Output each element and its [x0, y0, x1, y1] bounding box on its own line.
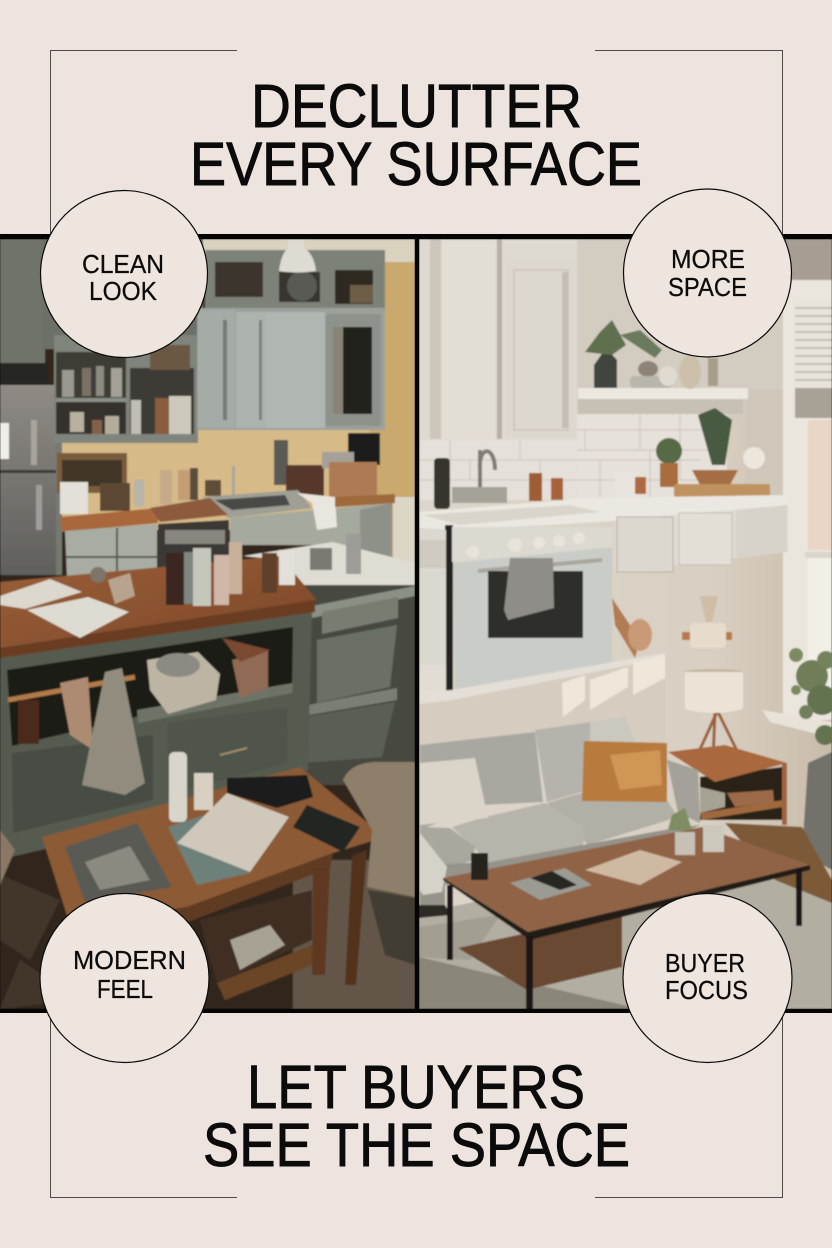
towels and rail	[8, 677, 135, 700]
appliance and basket	[147, 652, 220, 714]
counter decor	[434, 458, 450, 509]
closing headline: SEE THE SPACE	[203, 1111, 630, 1179]
right cabinets	[300, 585, 415, 785]
callout: more space: SPACE	[668, 272, 747, 302]
title: DECLUTTER	[251, 72, 582, 140]
callout: clean look: CLEAN	[82, 249, 164, 279]
callout: modern feel: FEEL	[97, 974, 153, 1004]
title	[190, 72, 642, 198]
island base	[0, 608, 312, 860]
coffee table	[458, 916, 623, 990]
callout: more space	[624, 189, 792, 357]
callout: modern feel	[40, 894, 209, 1062]
callout: buyer focus: FOCUS	[665, 975, 748, 1005]
right window sill, plant, armchair	[762, 710, 832, 734]
wall and sunlight below	[420, 696, 513, 744]
lower doors	[197, 308, 385, 430]
lamp	[698, 712, 738, 750]
bottles cluster	[166, 553, 184, 605]
counter and cabinets	[419, 495, 790, 530]
callout: clean look: LOOK	[89, 276, 158, 306]
white counter	[243, 542, 415, 586]
callout: clean look	[40, 190, 208, 358]
window and blinds	[783, 280, 832, 720]
table objects	[510, 868, 592, 900]
frame: bottom thin corner lines	[50, 1012, 782, 1198]
chair	[343, 762, 415, 897]
sofa	[420, 732, 543, 830]
callout: more space: MORE	[671, 244, 745, 274]
island butcher block	[0, 556, 315, 658]
stove	[445, 525, 453, 695]
panel: tidy kitchen and living room photo	[419, 239, 832, 1009]
closing headline	[203, 1053, 630, 1179]
table items	[65, 823, 172, 902]
centre divider	[415, 234, 419, 1013]
floating shelf	[578, 388, 748, 399]
pendant lamp	[279, 239, 316, 272]
white cabinets	[502, 240, 577, 440]
fridge	[0, 385, 56, 575]
upper wall	[762, 313, 782, 390]
photo band black border	[0, 234, 832, 1013]
callout: buyer focus: BUYER	[665, 948, 745, 978]
wooden table	[42, 767, 385, 925]
upper-left cabinet	[0, 239, 45, 363]
side table	[700, 767, 782, 820]
counter clutter	[57, 453, 127, 493]
shelf decor	[594, 348, 617, 388]
floor	[293, 860, 415, 1009]
open shelving	[54, 335, 198, 443]
frame: top thin corner lines	[50, 50, 782, 235]
subway tile backsplash	[419, 440, 577, 500]
glass cabinets top	[205, 250, 385, 314]
title: EVERY SURFACE	[190, 130, 642, 198]
callout: modern feel: MODERN	[73, 945, 186, 975]
base units back	[228, 502, 389, 546]
callout: buyer focus	[623, 894, 792, 1062]
rug	[419, 880, 832, 1009]
panel: cluttered kitchen photo	[0, 239, 415, 1009]
closing headline: LET BUYERS	[247, 1053, 585, 1121]
pillows	[582, 741, 667, 802]
ceiling and walls	[202, 239, 415, 263]
